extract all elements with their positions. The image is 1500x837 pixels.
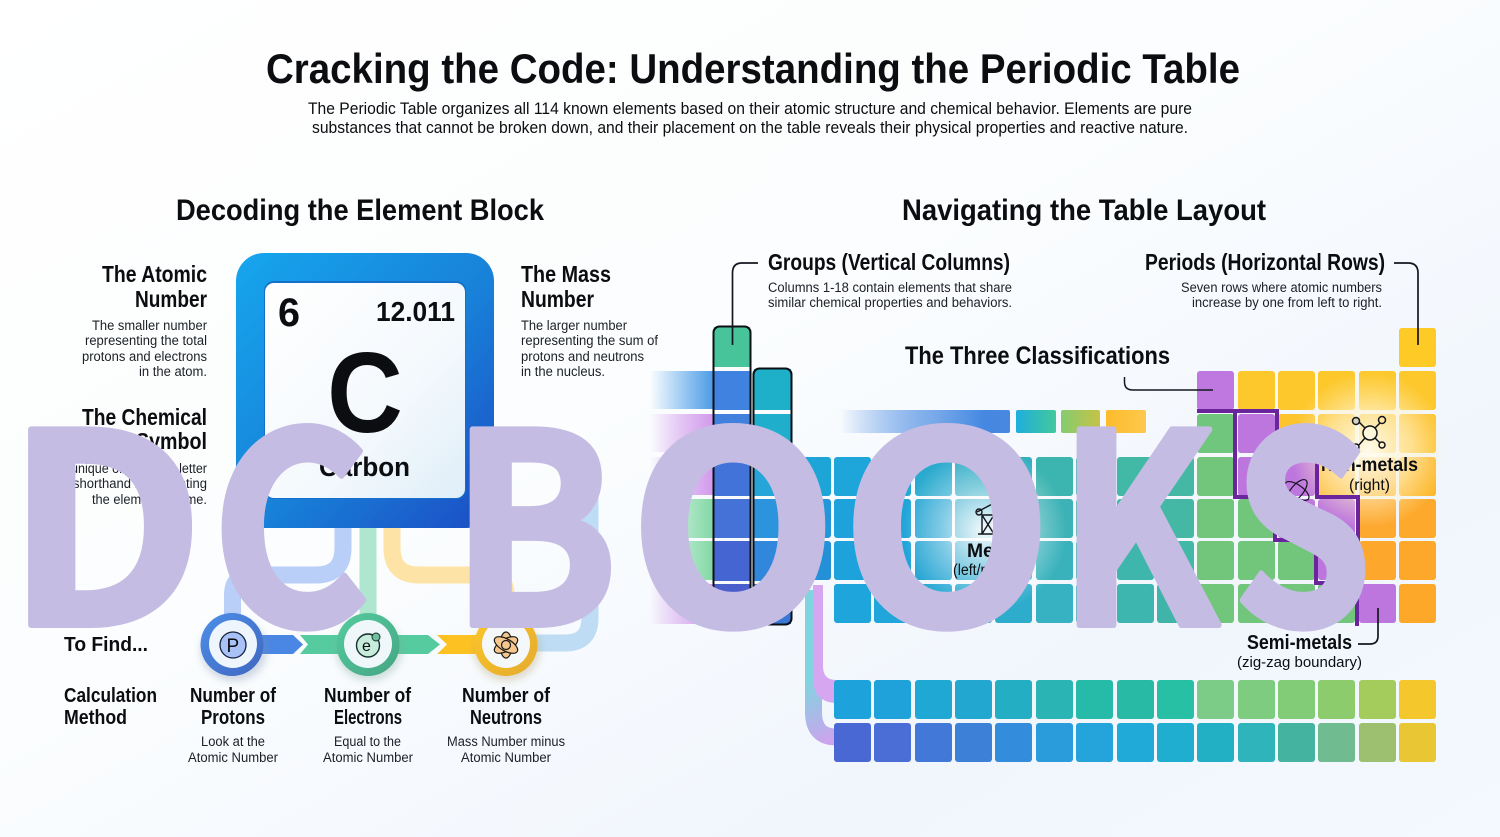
icon: protons step: P [226,636,239,657]
callout line: semi-metals [1358,608,1378,644]
watermark: DC BOOKS: D [6,319,204,701]
element name: Carbon [319,452,410,482]
callout line: groups [732,263,758,345]
atomic number 6: 6 [278,291,300,335]
label: metals [953,541,1027,579]
watermark: DC BOOKS: C [211,319,370,701]
text block: the atomic number: Number [135,286,207,312]
flow band to the actinide row [814,590,836,737]
strip of transition header cells [840,410,1146,433]
text block: the mass number: Number [521,286,594,312]
text block: the mass number: representing the sum of [521,333,658,348]
text block: groups: Groups (Vertical Columns) [768,249,1010,275]
text block: the chemical symbol: shorthand representing [73,476,207,491]
text block: number of protons [188,685,278,765]
text block: groups [768,249,1012,310]
text block: periods [1145,249,1385,310]
watermark: DC BOOKS: O [630,319,837,701]
text block: periods: increase by one from left to right. [1192,295,1382,310]
text block: number of electrons: Equal to the [334,734,401,749]
metals glow [903,448,1067,612]
text block: number of neutrons: Neutrons [470,707,542,729]
symbol C: C [327,330,403,457]
text block: the chemical symbol: unique one- or two-letter [71,461,207,476]
text block: number of protons: Protons [201,707,265,729]
row label: to find: To Find... [64,634,148,656]
atomic mass 12.011: 12.011 [376,296,455,327]
icon: electrons step [336,613,402,681]
text block: number of neutrons: Atomic Number [461,750,551,765]
text block: number of electrons: Number of [324,685,411,707]
text block: the mass number: The larger number [521,318,627,333]
flow band to the lanthanide row [813,585,836,703]
panel: element card [236,253,494,528]
icon: protons step [200,613,267,681]
arrow: protons to electrons [260,635,303,654]
arrow: electrons to neutrons [300,635,440,654]
watermark: DC BOOKS: S [1233,320,1372,702]
text block: periods: Seven rows where atomic numbers [1181,280,1382,295]
callout line: periods [1394,263,1418,345]
label: semi-metals [1237,632,1362,671]
text block: number of neutrons: Number of [462,685,550,707]
arrow: into neutrons [437,635,490,654]
highlighted group column 2 [754,368,792,624]
row label: calculation method: Method [64,707,127,729]
text block: the atomic number: in the atom. [139,364,207,379]
text block: the chemical symbol: the element's name. [92,492,207,507]
heading: navigating the table layout: Navigating the Table Layout [902,194,1266,227]
text block: number of protons: Atomic Number [188,750,278,765]
label: semi-metals: Semi-metals [1247,632,1352,654]
intro paragraph: substances that cannot be broken down, and their placement on the table reveals their physical properties and reactive nature. [312,119,1188,137]
text block: the mass number: in the nucleus. [521,364,605,379]
icon: semi-metals atom [1282,476,1312,506]
highlighted group column 1 [714,326,750,624]
label: non-metals [1321,455,1418,494]
label: non-metals: Non-metals [1321,455,1418,476]
heading: decoding the element block: Decoding the Element Block [176,194,544,227]
text block: number of protons: Look at the [201,734,265,749]
intro paragraph [308,100,1192,137]
icon: electrons step: e [362,638,371,655]
label: metals: Metals [967,541,1027,562]
text block: the atomic number: protons and electrons [82,349,207,364]
watermark: DC BOOKS: K [1058,319,1219,701]
text block: the atomic number: representing the total [85,333,207,348]
connector bands from element card to steps [232,490,590,643]
text block: number of electrons: Electrons [334,707,402,729]
semi-metal zig-zag boundary [1197,411,1358,626]
column next to highlighted groups [794,457,831,580]
text block: the atomic number [82,261,207,379]
text block: the chemical symbol: The Chemical [82,404,207,430]
text block: the mass number [521,261,658,379]
watermark: DC BOOKS: B [450,319,618,701]
intro paragraph: The Periodic Table organizes all 114 known elements based on their atomic structure and chemical behavior. Elements are pure [308,100,1192,118]
text block: number of neutrons: Mass Number minus [447,734,565,749]
text block: the atomic number: The Atomic [102,261,207,287]
text block: number of electrons: Atomic Number [323,750,413,765]
text block: groups: Columns 1-18 contain elements that share [768,280,1012,295]
text block: number of neutrons [447,685,565,765]
watermark: DC BOOKS: O [842,319,1052,702]
chart: periodic table main grid [834,328,1436,623]
text block: groups: similar chemical properties and behaviors. [768,295,1012,310]
icon: neutrons step [474,613,540,681]
heading: the three classifications: The Three Classifications [905,342,1170,370]
text block: the mass number: protons and neutrons [521,349,644,364]
text block: the mass number: The Mass [521,261,611,287]
text block: number of protons: Number of [190,685,276,707]
row label: calculation method [64,685,157,729]
text block: number of electrons [323,685,413,765]
label: non-metals: (right) [1349,477,1390,494]
non-metal glow [1291,372,1447,528]
icon: non-metals molecule [1352,416,1386,450]
label: semi-metals: (zig-zag boundary) [1237,654,1362,671]
chart: lanthanide and actinide rows [834,680,1436,762]
title: Cracking the Code: Understanding the Periodic Table [266,45,1240,92]
text block: the chemical symbol [71,404,207,507]
text block: periods: Periods (Horizontal Rows) [1145,249,1385,275]
watermark: DC BOOKS [6,319,1372,702]
icon: metals crane [976,500,1001,534]
text block: the chemical symbol: Symbol [136,428,207,454]
callout line: the three classifications [1124,377,1213,390]
text block: the atomic number: The smaller number [92,318,207,333]
row label: calculation method: Calculation [64,685,157,707]
label: metals: (left/middle) [953,562,1027,579]
faded left rows of the table [650,371,714,624]
